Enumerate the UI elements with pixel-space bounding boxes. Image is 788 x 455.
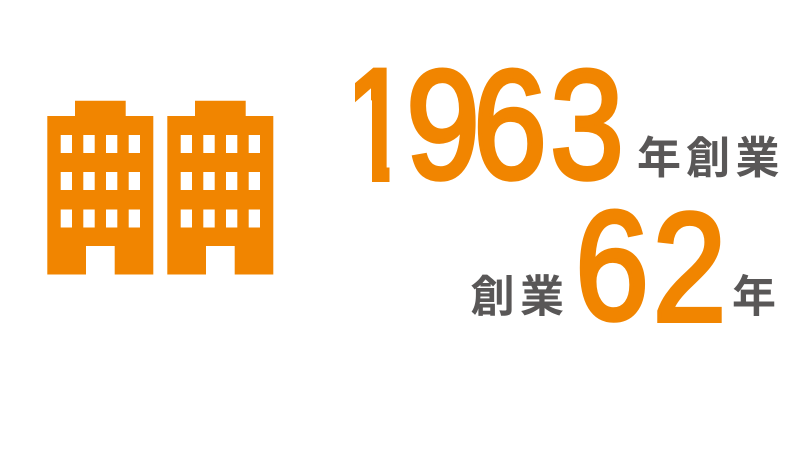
year number 1963: 9 bbox=[406, 37, 480, 211]
year number 1963 bbox=[355, 68, 620, 182]
label: 年創業 bbox=[637, 134, 780, 183]
icon: right building bbox=[167, 101, 273, 274]
number 62 bbox=[575, 178, 726, 354]
label: 年創業: 年 bbox=[637, 134, 681, 183]
label: 年: 年 bbox=[732, 272, 776, 322]
icon: left building bbox=[47, 101, 153, 274]
year number 1963: 1 bbox=[340, 35, 413, 217]
label: 創業 bbox=[470, 272, 564, 322]
label: 創業: 業 bbox=[520, 272, 564, 322]
label: 創業: 創 bbox=[470, 272, 514, 322]
year number 1963: 6 bbox=[473, 37, 547, 211]
number 62: 2 bbox=[652, 180, 726, 354]
year number 1963: 3 bbox=[550, 37, 624, 211]
icon: office buildings bbox=[47, 101, 273, 274]
label: 年創業: 創 bbox=[686, 134, 730, 183]
label: 年創業: 業 bbox=[736, 134, 780, 183]
number 62: 6 bbox=[575, 178, 649, 352]
